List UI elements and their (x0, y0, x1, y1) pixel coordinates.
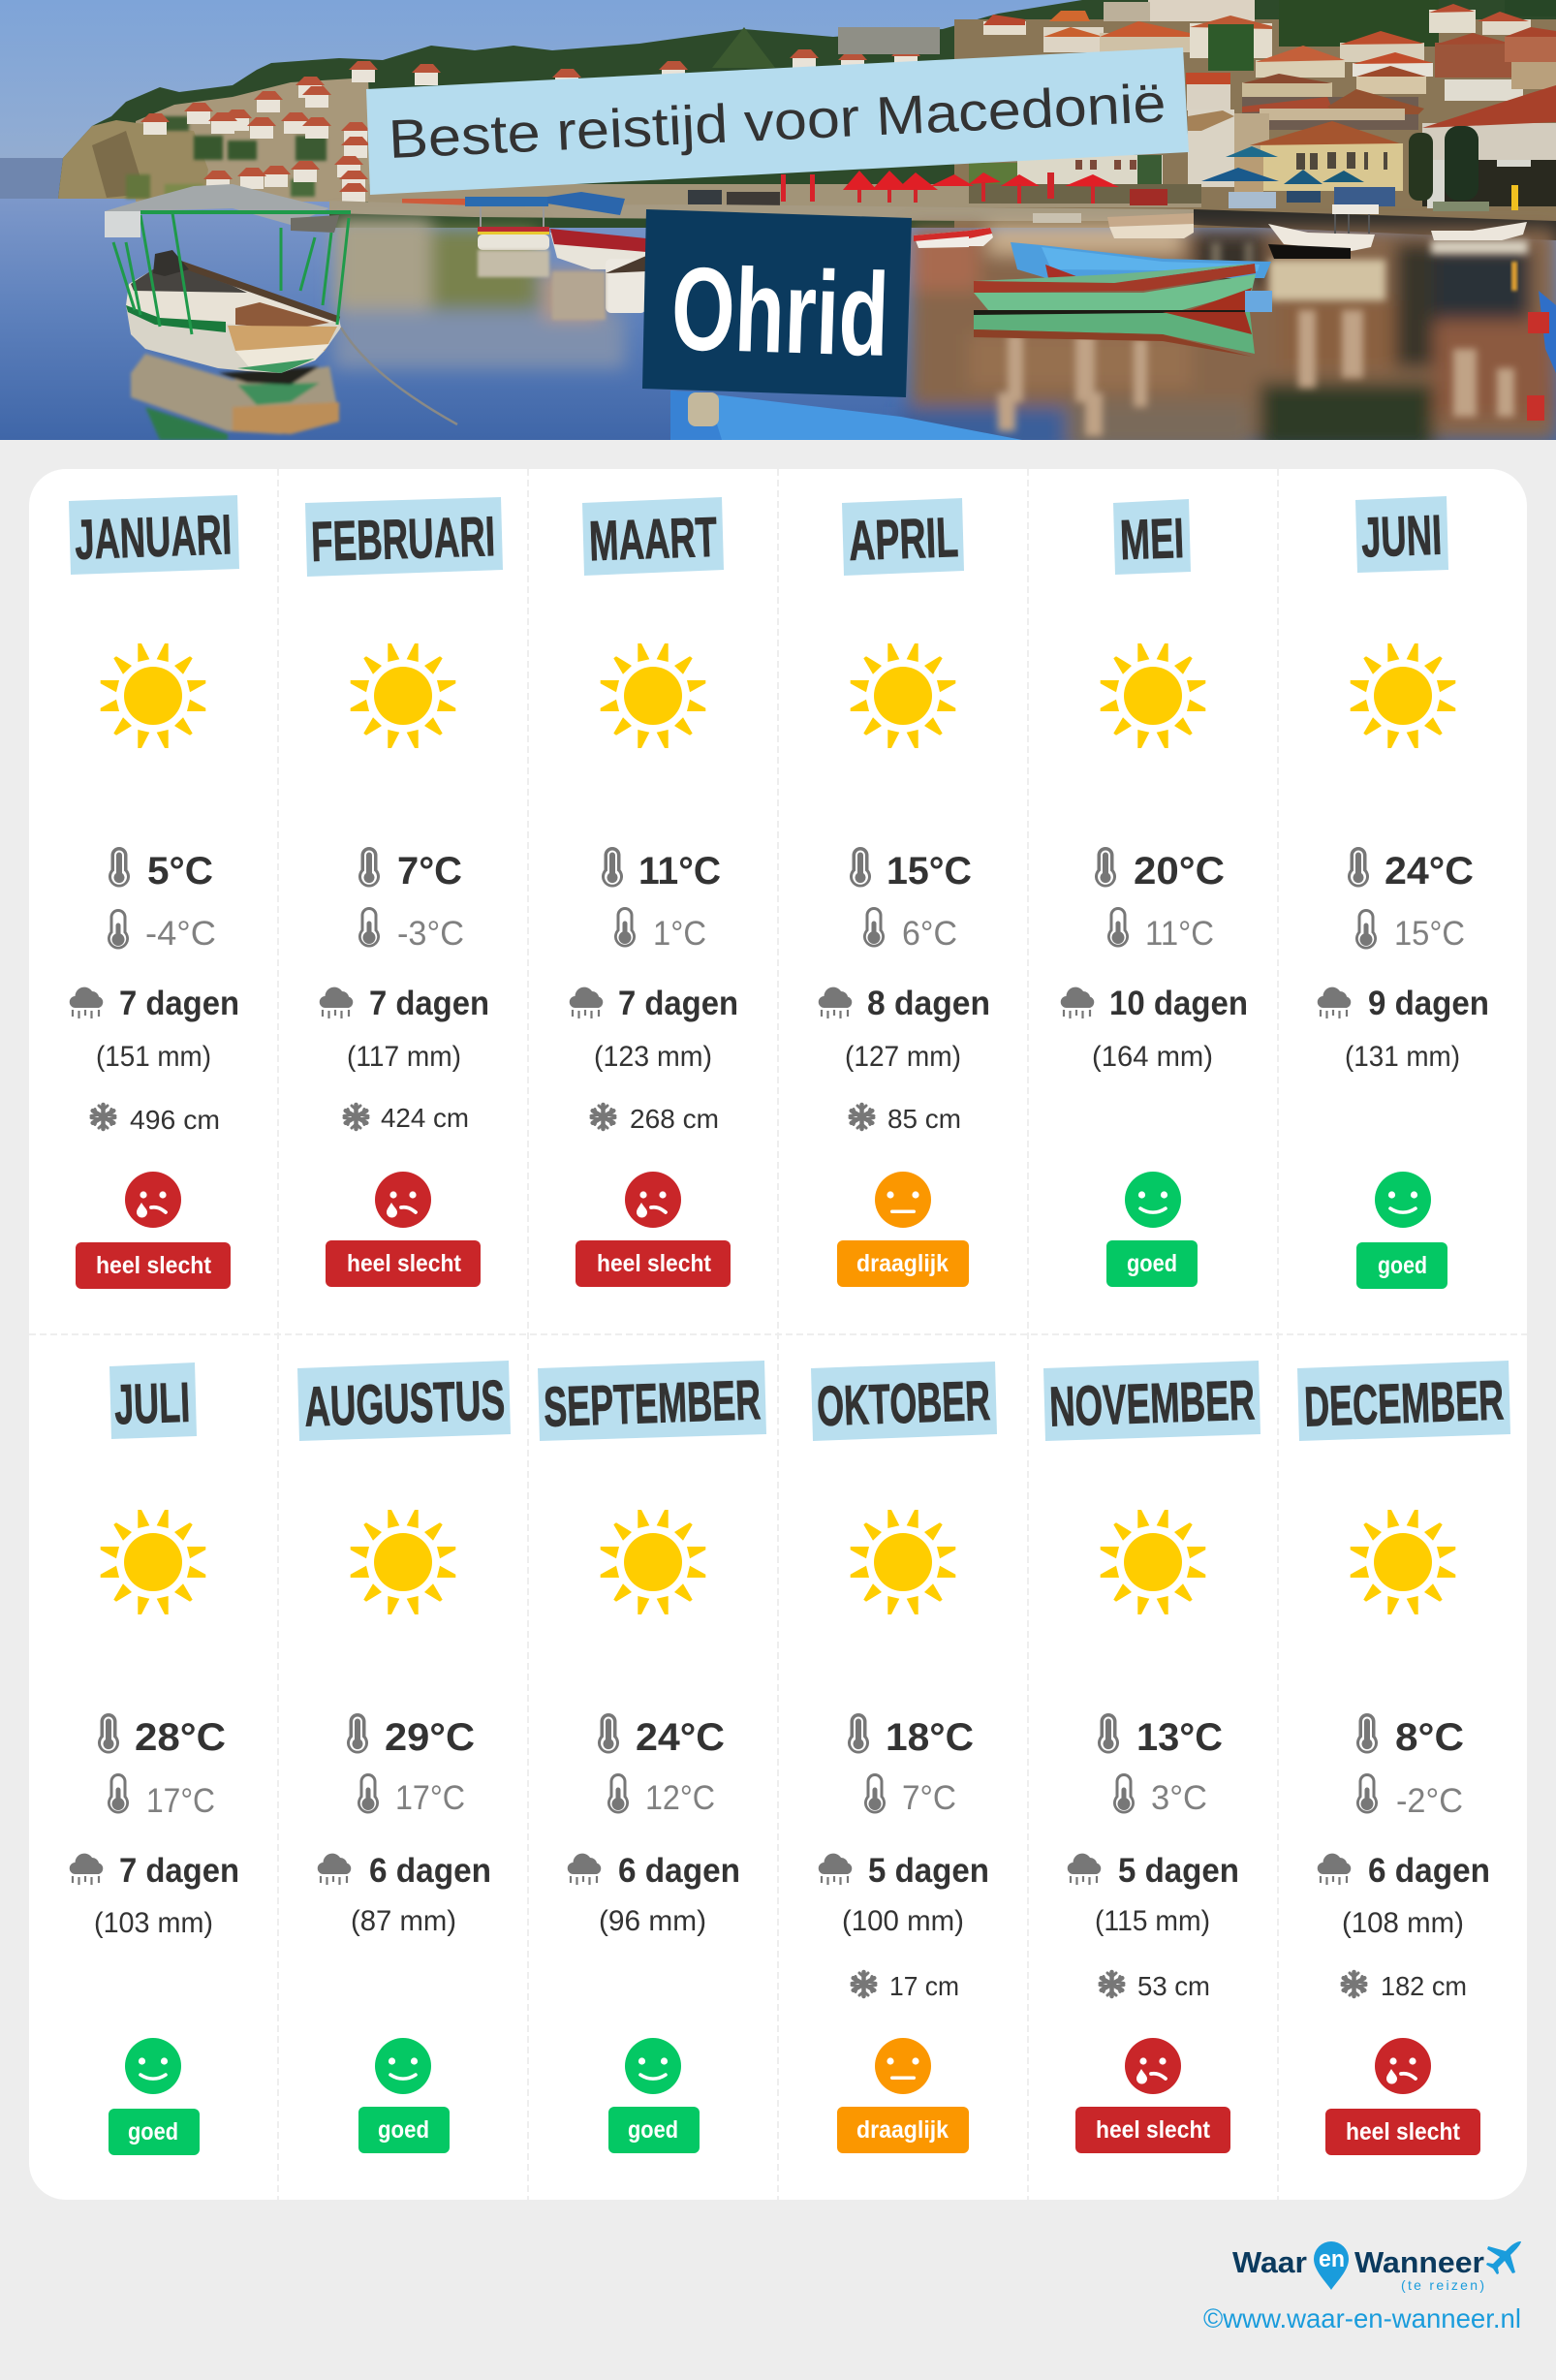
month label: APRIL (848, 506, 959, 573)
rating badge: goed (628, 2116, 678, 2144)
snowfall: 496 cm (130, 1105, 220, 1135)
maximum temperature: 7°C (397, 850, 462, 892)
minimum temperature (863, 907, 957, 953)
icon: sun (1101, 643, 1205, 748)
rain days: 7 dagen (618, 985, 738, 1022)
rain days: 5 dagen (868, 1852, 989, 1890)
minimum temperature: 17°C (395, 1779, 465, 1817)
rain days: 7 dagen (119, 1852, 239, 1890)
left moored boats (465, 192, 646, 320)
rainfall: (87 mm) (351, 1905, 456, 1937)
logo: Waar en Wanneer (1232, 2241, 1521, 2293)
cell: januari (69, 495, 239, 1289)
big boat reflection (131, 354, 339, 440)
rating badge (837, 2107, 969, 2153)
rain days (568, 1852, 740, 1890)
minimum temperature: 1°C (653, 915, 706, 953)
month label: JANUARI (74, 503, 233, 572)
rain days: 10 dagen (1109, 985, 1248, 1022)
snowfall: 182 cm (1381, 1971, 1467, 2001)
minimum temperature: -2°C (1396, 1782, 1463, 1820)
icon: sun (1351, 1510, 1455, 1614)
rating badge (358, 2107, 450, 2153)
maximum temperature (1348, 847, 1474, 892)
month label (811, 1362, 997, 1441)
maximum temperature (850, 847, 972, 892)
maximum temperature (358, 847, 462, 892)
snowfall: 424 cm (381, 1103, 469, 1133)
icon: smiling face (625, 2038, 681, 2094)
icon: sun (1351, 643, 1455, 748)
rain days (70, 1852, 239, 1890)
maximum temperature (347, 1713, 475, 1759)
maximum temperature: 15°C (887, 850, 972, 892)
minimum temperature (614, 907, 706, 953)
month label (582, 497, 724, 576)
rain days: 7 dagen (119, 985, 239, 1022)
icon: crying face (1125, 2038, 1181, 2094)
icon: crying face (375, 1172, 431, 1228)
minimum temperature: 7°C (902, 1779, 956, 1817)
snowfall (591, 1104, 719, 1134)
minimum temperature: -3°C (397, 915, 464, 953)
maximum temperature: 5°C (147, 850, 213, 892)
icon: airplane (1486, 2241, 1521, 2274)
minimum temperature: 17°C (146, 1782, 215, 1820)
rainfall: (96 mm) (599, 1905, 706, 1937)
rain days: 6 dagen (369, 1852, 491, 1890)
month label (1113, 499, 1191, 575)
maximum temperature (98, 1713, 226, 1759)
rating badge: heel slecht (1346, 2118, 1461, 2145)
month label (1043, 1361, 1260, 1441)
month label: JULI (113, 1371, 191, 1436)
maximum temperature (598, 1713, 725, 1759)
minimum temperature: 12°C (645, 1779, 715, 1817)
rain days (819, 1852, 989, 1890)
rating badge: draaglijk (856, 1250, 949, 1277)
month label: MAART (588, 506, 718, 573)
rating badge (576, 1240, 731, 1287)
rainfall: (151 mm) (96, 1041, 211, 1073)
rain days: 5 dagen (1118, 1852, 1239, 1890)
rainfall: (127 mm) (845, 1041, 961, 1073)
icon: crying face (1375, 2038, 1431, 2094)
minimum temperature (607, 1773, 715, 1817)
title banner: Beste reistijd voor Macedonië (388, 72, 1167, 170)
maximum temperature (109, 847, 213, 892)
snowfall (1342, 1971, 1467, 2001)
month label (305, 497, 503, 577)
city label: Ohrid (642, 209, 912, 397)
cell: juni (1318, 496, 1489, 1289)
minimum temperature: 6°C (902, 915, 957, 953)
icon: sun (601, 1510, 705, 1614)
cell: juli (70, 1362, 239, 2155)
rating badge (326, 1240, 481, 1287)
website credit: ©www.waar-en-wanneer.nl (1203, 2303, 1521, 2333)
month label: SEPTEMBER (543, 1368, 762, 1439)
rain days (819, 985, 990, 1022)
rainfall: (131 mm) (1345, 1041, 1460, 1073)
maximum temperature: 20°C (1134, 850, 1225, 892)
rainfall: (117 mm) (347, 1041, 461, 1073)
minimum temperature (1356, 1773, 1463, 1820)
month label: OKTOBER (816, 1369, 991, 1438)
rain days (1068, 1852, 1239, 1890)
icon: smiling face (1125, 1172, 1181, 1228)
icon: neutral face (875, 1172, 931, 1228)
panel: monthly climate card (29, 469, 1527, 2200)
rating badge: heel slecht (347, 1250, 462, 1277)
snowfall: 17 cm (889, 1971, 959, 2001)
minimum temperature (1113, 1773, 1207, 1817)
icon: smiling face (125, 2038, 181, 2094)
minimum temperature (108, 909, 216, 953)
maximum temperature: 24°C (636, 1716, 725, 1759)
icon: sun (351, 643, 455, 748)
cell: augustus (297, 1361, 511, 2153)
month label: JUNI (1360, 504, 1443, 569)
maximum temperature: 13°C (1136, 1716, 1223, 1759)
icon: smiling face (375, 2038, 431, 2094)
rating badge (76, 1242, 231, 1289)
icon: sun (101, 643, 205, 748)
rain days (1318, 985, 1489, 1022)
minimum temperature (358, 907, 464, 953)
big boat (105, 184, 351, 373)
rating badge: goed (378, 2116, 429, 2144)
cell: september (538, 1361, 766, 2153)
cell: november (1043, 1361, 1260, 2153)
title banner (366, 47, 1189, 195)
maximum temperature: 11°C (638, 850, 721, 892)
icon: neutral face (875, 2038, 931, 2094)
rating badge (1356, 1242, 1447, 1289)
rating badge (109, 2109, 200, 2155)
icon: sun (851, 643, 955, 748)
rating badge: draaglijk (856, 2116, 949, 2144)
month label (109, 1362, 197, 1439)
icon: sun (851, 1510, 955, 1614)
rating badge: goed (1378, 1252, 1427, 1279)
cell: april (819, 498, 990, 1287)
snowfall: 85 cm (887, 1104, 961, 1134)
rating badge: heel slecht (597, 1250, 712, 1277)
rain days (570, 985, 738, 1022)
maximum temperature: 18°C (886, 1716, 974, 1759)
snowfall (850, 1104, 961, 1134)
rain days (1318, 1852, 1490, 1890)
month label: AUGUSTUS (303, 1368, 506, 1439)
month label (297, 1361, 511, 1441)
month label: NOVEMBER (1048, 1368, 1256, 1439)
snowfall (1100, 1971, 1210, 2001)
maximum temperature: 8°C (1395, 1716, 1464, 1759)
rain days (320, 985, 489, 1022)
header photo: Ohrid lake and town (0, 0, 1556, 440)
maximum temperature (848, 1713, 974, 1759)
icon: sun (1101, 1510, 1205, 1614)
right hillside (954, 19, 1556, 228)
rainfall: (108 mm) (1342, 1907, 1464, 1939)
rainfall: (100 mm) (842, 1905, 964, 1937)
icon: crying face (125, 1172, 181, 1228)
icon: sun (601, 643, 705, 748)
logo: Waar en Wanneer: Waar (1232, 2245, 1307, 2279)
maximum temperature (1098, 1713, 1223, 1759)
minimum temperature (1355, 909, 1465, 953)
maximum temperature: 24°C (1385, 850, 1474, 892)
snowfall: 268 cm (630, 1104, 719, 1134)
cell: december (1297, 1361, 1510, 2155)
water reflections (334, 218, 1556, 455)
rainfall: (164 mm) (1092, 1041, 1213, 1073)
distant boats (969, 228, 993, 246)
maximum temperature: 28°C (135, 1716, 226, 1759)
rating badge: heel slecht (96, 1252, 212, 1279)
rating badge (1075, 2107, 1230, 2153)
snowfall (852, 1971, 959, 2001)
rain days: 8 dagen (867, 985, 990, 1022)
maximum temperature: 29°C (385, 1716, 475, 1759)
minimum temperature (864, 1773, 956, 1817)
rain days: 6 dagen (618, 1852, 740, 1890)
icon: crying face (625, 1172, 681, 1228)
minimum temperature: 11°C (1145, 915, 1214, 953)
month label: FEBRUARI (310, 505, 496, 574)
month label (842, 498, 964, 576)
cell: mei (1061, 499, 1248, 1287)
rating badge (837, 1240, 969, 1287)
snowfall: 53 cm (1137, 1971, 1210, 2001)
minimum temperature (108, 1773, 215, 1820)
blue and green boats (974, 242, 1272, 357)
logo: Waar en Wanneer: Wanneer (1354, 2245, 1484, 2279)
snowfall (91, 1105, 220, 1135)
rain days: 9 dagen (1368, 985, 1489, 1022)
rating badge: goed (1127, 1250, 1177, 1277)
rating badge (608, 2107, 700, 2153)
rain days: 6 dagen (1368, 1852, 1490, 1890)
maximum temperature (602, 847, 721, 892)
rating badge (1106, 1240, 1198, 1287)
rain days: 7 dagen (369, 985, 489, 1022)
icon: sun (351, 1510, 455, 1614)
shore strip under banner (368, 184, 1201, 207)
rain days (70, 985, 239, 1022)
rating badge: heel slecht (1096, 2116, 1211, 2144)
maximum temperature (1356, 1713, 1464, 1759)
city label: Ohrid: Ohrid (669, 242, 890, 381)
minimum temperature (358, 1773, 465, 1817)
rainfall: (103 mm) (94, 1907, 213, 1939)
cell: februari (305, 497, 503, 1287)
month label (538, 1361, 766, 1441)
minimum temperature: 15°C (1394, 915, 1465, 953)
rainfall: (115 mm) (1095, 1905, 1210, 1937)
icon: location pin (1314, 2241, 1349, 2290)
minimum temperature: -4°C (145, 915, 216, 953)
rainfall: (123 mm) (594, 1041, 712, 1073)
cell: maart (570, 497, 738, 1287)
rating badge (1325, 2109, 1480, 2155)
month label (1355, 496, 1448, 573)
rain days (318, 1852, 491, 1890)
minimum temperature: 3°C (1151, 1779, 1207, 1817)
icon: location pin: en (1319, 2246, 1345, 2272)
logo: Waar en Wanneer: (te reizen) (1401, 2277, 1484, 2293)
rating badge: goed (128, 2118, 178, 2145)
icon: sun (101, 1510, 205, 1614)
minimum temperature (1107, 907, 1214, 953)
cell: oktober (811, 1362, 997, 2153)
icon: smiling face (1375, 1172, 1431, 1228)
month label: MEI (1119, 507, 1185, 572)
month label (69, 495, 239, 575)
maximum temperature (1095, 847, 1225, 892)
